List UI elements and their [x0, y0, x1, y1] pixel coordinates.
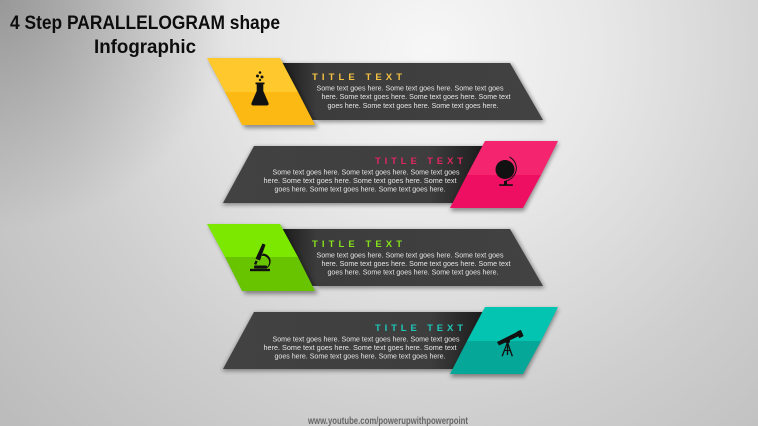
- body text 4: here. Some text goes here. Some text goes here. Some text: [264, 343, 457, 352]
- heading 2: TITLE TEXT: [375, 156, 463, 167]
- panel: step 4 teal: [222, 307, 559, 377]
- body text 1: Some text goes here. Some text goes here. Some text goes: [316, 84, 504, 92]
- dark text banner 2: [223, 146, 487, 203]
- body text 2: Some text goes here. Some text goes here. Some text goes: [272, 168, 460, 176]
- body text 2: goes here. Some text goes here. Some text goes here.: [274, 184, 446, 194]
- body text 4: Some text goes here. Some text goes here. Some text goes: [272, 334, 460, 344]
- icon: microscope: [250, 244, 271, 271]
- heading 1: TITLE TEXT: [312, 72, 402, 83]
- body text 2: here. Some text goes here. Some text goes here. Some text: [264, 176, 457, 185]
- icon: globe: [496, 157, 516, 186]
- icon: flask: [251, 71, 269, 106]
- yellow parallelogram: [207, 58, 315, 125]
- heading 4: TITLE TEXT: [375, 323, 463, 334]
- dark text banner 1: [280, 63, 543, 120]
- body text 3: Some text goes here. Some text goes here. Some text goes: [316, 250, 504, 260]
- dark text banner 3: [280, 229, 543, 286]
- body text 3: goes here. Some text goes here. Some text goes here.: [328, 268, 498, 276]
- pink parallelogram: [450, 141, 558, 208]
- title: 4 Step PARALLELOGRAM shape: [10, 13, 280, 34]
- panel: step 1 yellow: [207, 58, 545, 128]
- body text 4: goes here. Some text goes here. Some text goes here.: [274, 352, 446, 360]
- panel: step 3 green: [207, 224, 545, 294]
- dark text banner 4: [223, 312, 487, 369]
- teal parallelogram: [450, 307, 558, 374]
- body text 1: [316, 84, 511, 110]
- body text 4: [264, 334, 460, 360]
- heading 3: TITLE TEXT: [312, 239, 402, 250]
- body text 3: [316, 250, 511, 276]
- body text 3: here. Some text goes here. Some text goes here. Some text: [322, 259, 511, 268]
- panel: step 2 pink: [222, 141, 559, 211]
- title: [10, 13, 280, 58]
- body text 1: here. Some text goes here. Some text goes here. Some text: [322, 92, 511, 101]
- icon: telescope: [497, 330, 524, 356]
- title: Infographic: [94, 37, 196, 58]
- body text 1: goes here. Some text goes here. Some text goes here.: [328, 101, 498, 110]
- body text 2: [264, 168, 460, 194]
- green parallelogram: [207, 224, 315, 291]
